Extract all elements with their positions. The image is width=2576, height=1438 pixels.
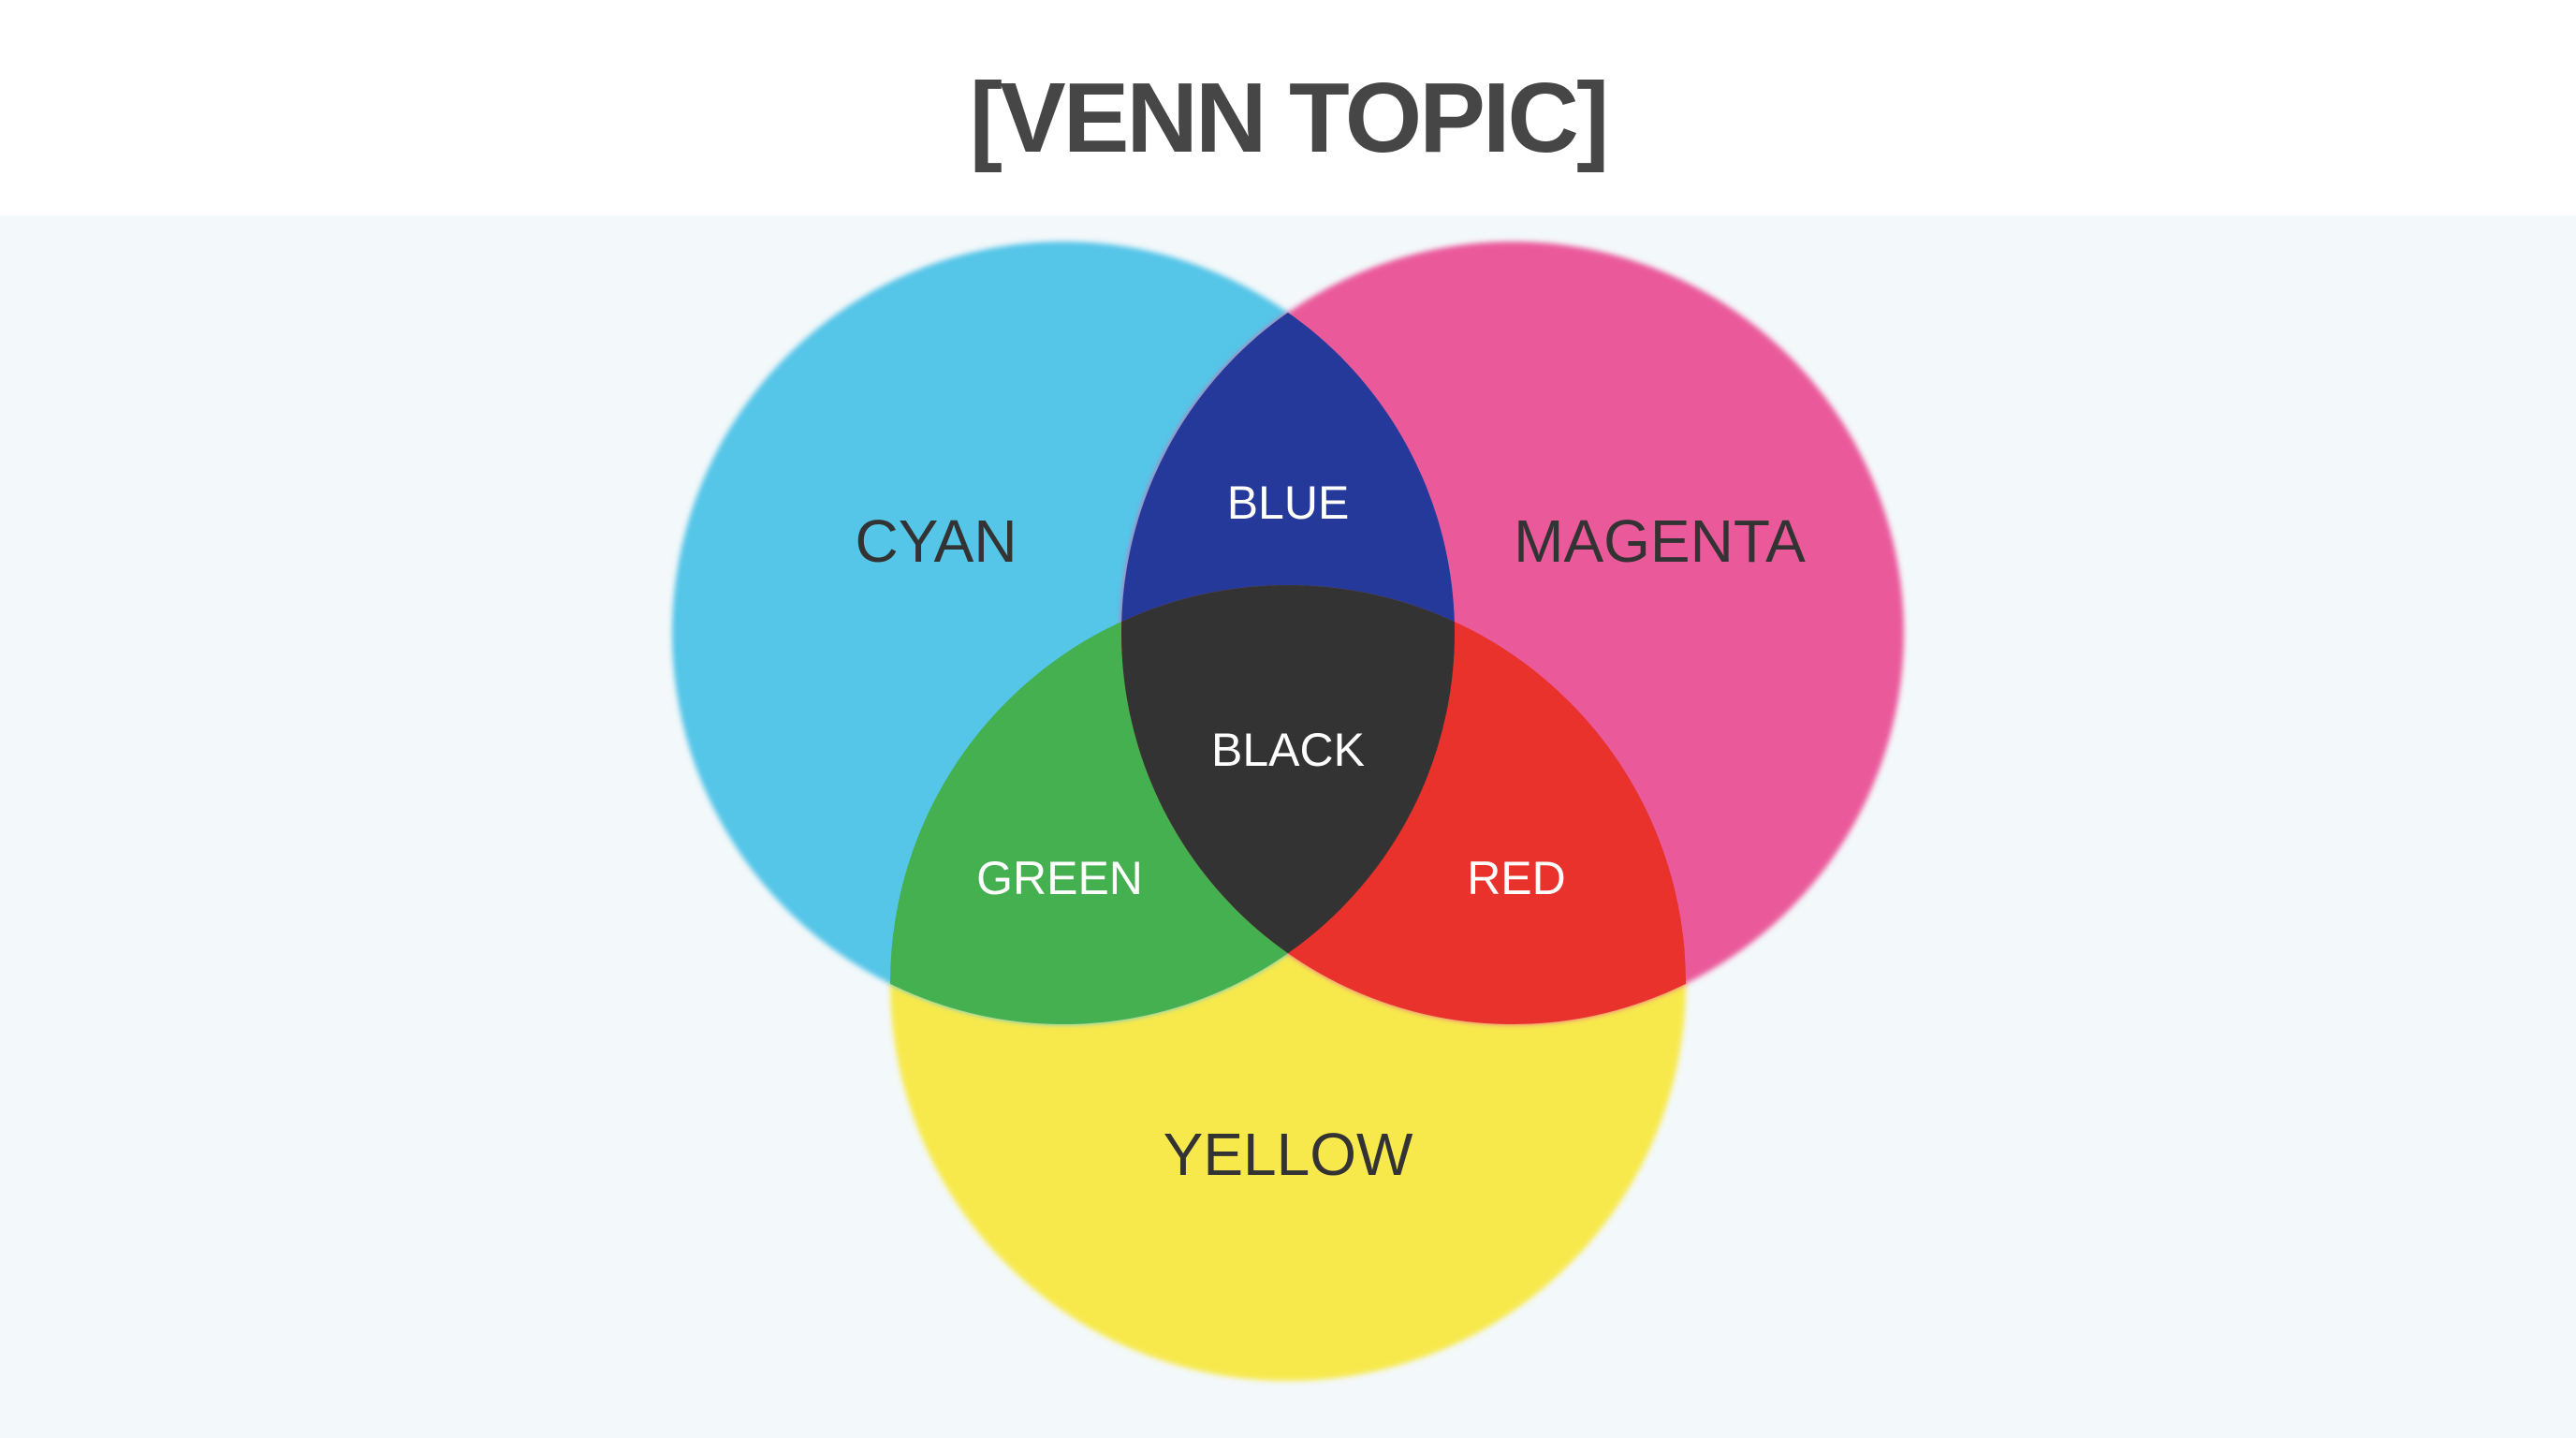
labels: YELLOW [1164, 1121, 1413, 1188]
labels: RED [1467, 852, 1566, 904]
overlap: blue [1121, 313, 1455, 622]
circle: cyan [672, 242, 1455, 1024]
title: [VENN TOPIC] [970, 63, 1606, 173]
overlap: red [1121, 585, 1686, 1024]
circle: yellow [890, 585, 1686, 1381]
overlap: green [890, 585, 1455, 1024]
overlap: black [1121, 585, 1455, 953]
labels: MAGENTA [1514, 507, 1806, 575]
labels [855, 477, 1806, 1188]
labels: BLACK [1211, 724, 1365, 776]
labels: CYAN [855, 507, 1017, 575]
venn diagram [668, 238, 1908, 1386]
labels: BLUE [1227, 477, 1349, 529]
circle: magenta [1121, 242, 1904, 1024]
labels: GREEN [976, 852, 1143, 904]
